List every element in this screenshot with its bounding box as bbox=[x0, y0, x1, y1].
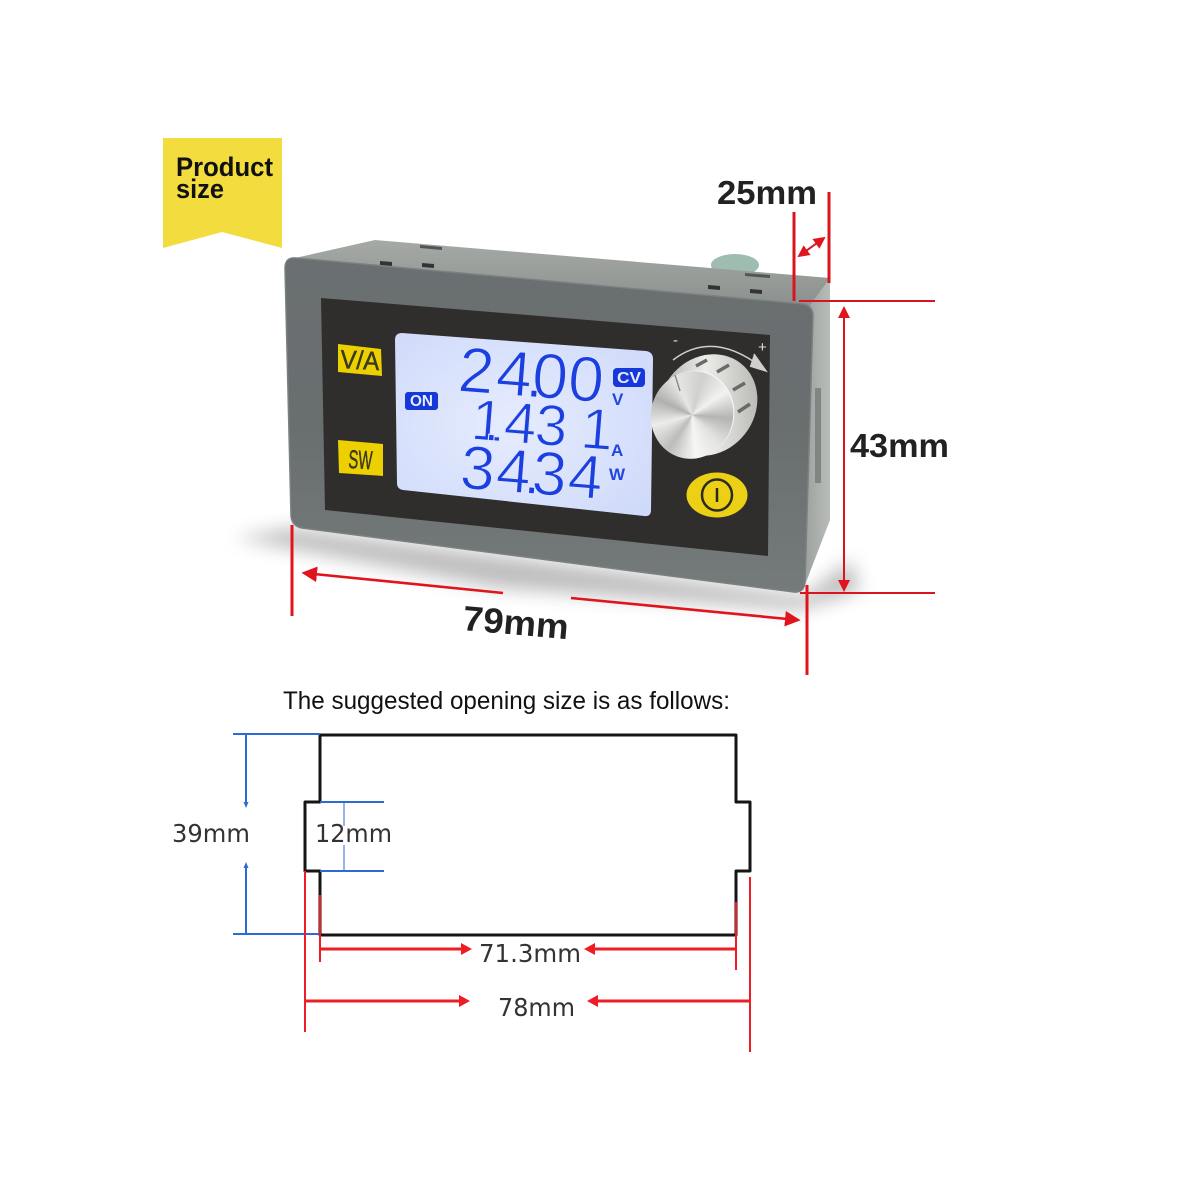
dimension: 39mm bbox=[172, 734, 320, 934]
knob direction arc bbox=[673, 332, 767, 371]
indicator: ON bbox=[405, 392, 438, 410]
unit labels: A bbox=[611, 441, 623, 460]
potentiometer rear bbox=[711, 254, 759, 276]
dimension: 25mm: 25mm bbox=[717, 174, 817, 211]
dimension: 78mm bbox=[305, 871, 750, 1052]
dimension: 12mm: 12mm bbox=[315, 819, 392, 848]
dimension: 71.3mm bbox=[320, 895, 736, 970]
front frame bbox=[285, 258, 813, 592]
unit labels bbox=[609, 390, 626, 484]
dark panel bbox=[321, 298, 770, 556]
panel cutout outline bbox=[305, 735, 750, 935]
reading: current: 1.431 bbox=[469, 387, 616, 463]
unit labels: V bbox=[612, 390, 624, 409]
dimension: 25mm bbox=[717, 174, 829, 301]
housing top bbox=[295, 240, 830, 310]
indicator: CV bbox=[613, 368, 645, 387]
dimension: 12mm bbox=[315, 802, 392, 871]
product photo: digital power module bbox=[235, 240, 860, 610]
LCD screen bbox=[395, 333, 653, 516]
knob direction arc: + bbox=[758, 339, 767, 356]
reading: power: 34.34 bbox=[458, 433, 605, 513]
button: SW bbox=[338, 440, 383, 476]
dimension: 39mm: 39mm bbox=[172, 819, 250, 848]
indicator: CV: CV bbox=[617, 370, 641, 387]
device shadow bbox=[235, 528, 860, 610]
button: SW: SW bbox=[348, 444, 373, 475]
dimension: 79mm bbox=[292, 525, 807, 675]
dimension: 79mm: 79mm bbox=[461, 599, 570, 647]
indicator: ON: ON bbox=[410, 393, 433, 410]
power button bbox=[686, 472, 748, 518]
housing side bbox=[803, 278, 830, 590]
badge: product size: Product bbox=[176, 152, 273, 182]
badge: product size bbox=[163, 138, 282, 248]
button: V/A: V/A bbox=[340, 344, 381, 376]
knob direction arc: - bbox=[673, 332, 678, 349]
caption: opening size: The suggested opening size is as follows: bbox=[283, 687, 730, 715]
dimension: 43mm: 43mm bbox=[850, 427, 949, 464]
dimension: 71.3mm: 71.3mm bbox=[479, 939, 581, 968]
knob bbox=[638, 334, 778, 476]
reading: voltage: 24.00 bbox=[456, 333, 607, 416]
dimension: 78mm: 78mm bbox=[498, 993, 575, 1022]
badge: product size: size bbox=[176, 174, 224, 204]
unit labels: W bbox=[609, 465, 626, 484]
